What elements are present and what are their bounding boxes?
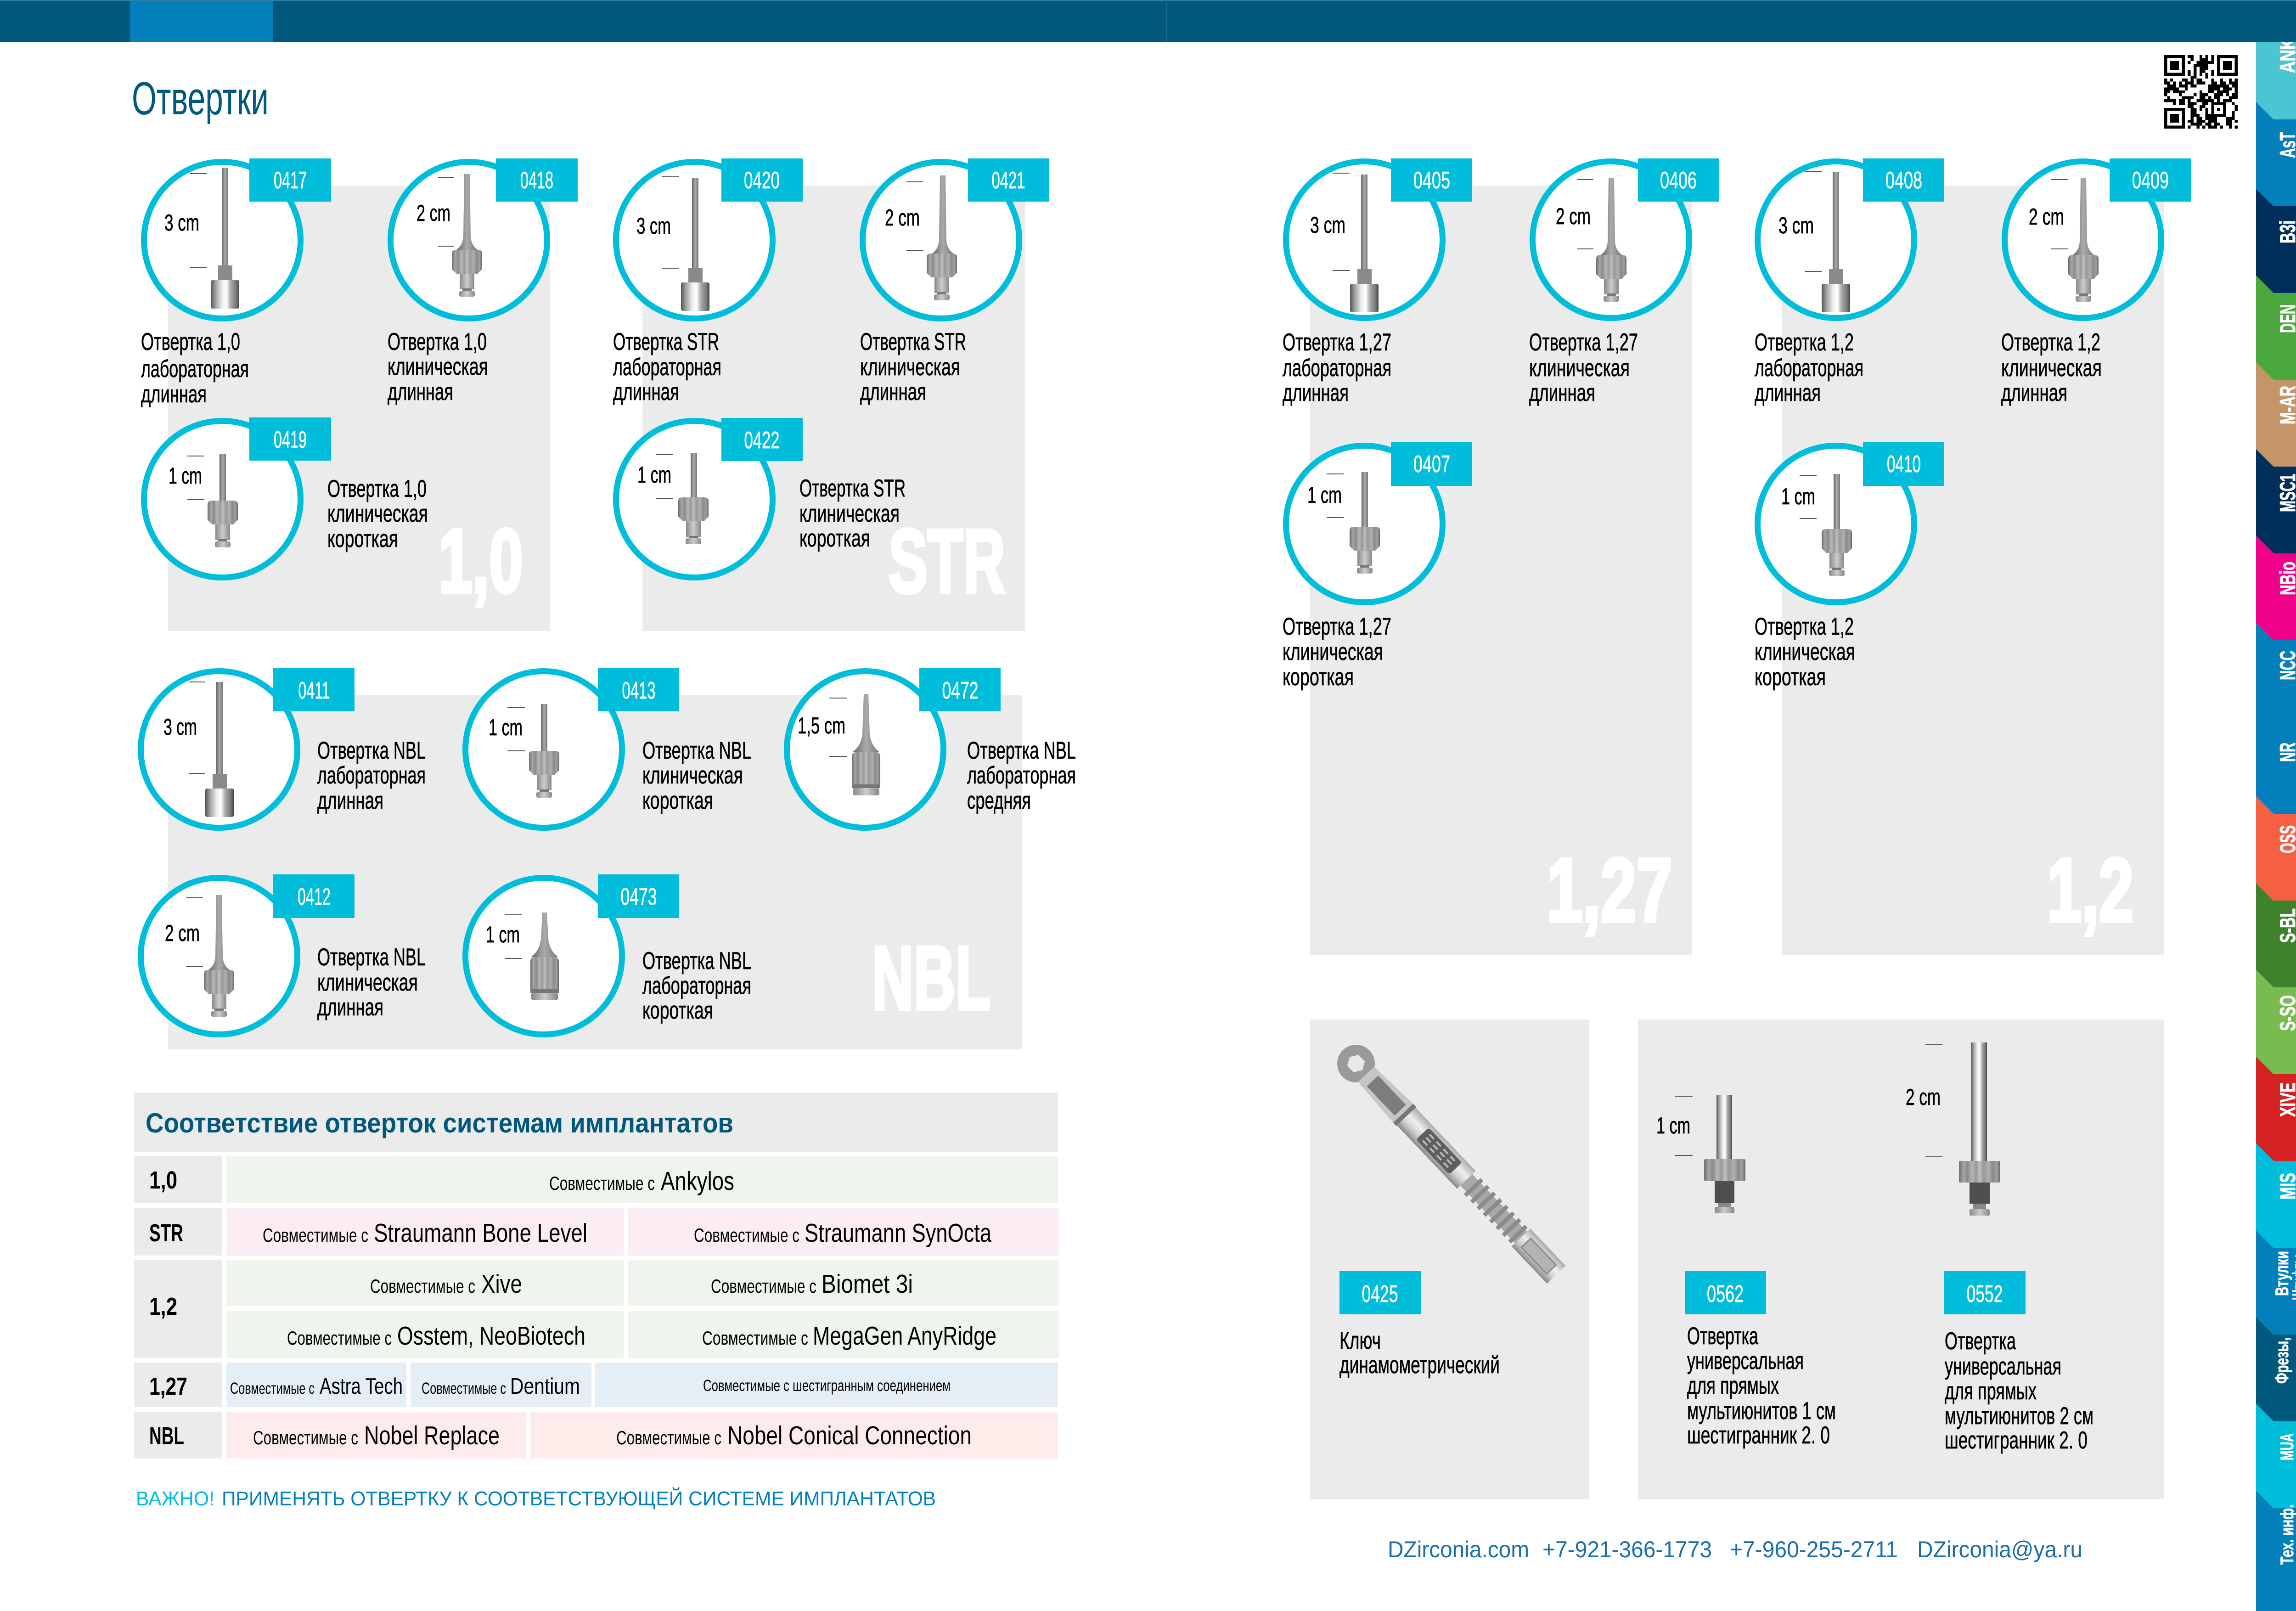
caption: короткая — [799, 525, 870, 552]
panel: 1,27 — [1310, 186, 1692, 955]
tab MUA — [2256, 1404, 2296, 1508]
caption: клиническая — [1283, 638, 1383, 665]
caption: мультиюнитов 2 см — [1945, 1403, 2093, 1430]
code: 0413 — [622, 677, 656, 704]
row NBL — [134, 1412, 1058, 1459]
caption: длинная — [2001, 379, 2067, 406]
row STR: Straumann SynOcta — [805, 1218, 991, 1248]
row NBL: Совместимые с — [616, 1427, 721, 1448]
caption: шестигранник 2. 0 — [1945, 1427, 2088, 1454]
code: 0409 — [2132, 167, 2169, 194]
row 1,2: Xive — [481, 1269, 522, 1299]
caption: клиническая — [317, 969, 418, 996]
screwdriver — [208, 454, 238, 547]
code — [2110, 158, 2191, 202]
size — [489, 708, 525, 751]
caption: клиническая — [388, 353, 488, 380]
row 1,0: Совместимые с — [549, 1172, 655, 1194]
header bar — [0, 0, 2296, 42]
caption — [1283, 329, 1391, 406]
caption: Отвертка 1,2 — [2001, 329, 2100, 356]
code — [721, 418, 803, 461]
circle — [141, 671, 298, 828]
circle — [466, 878, 622, 1034]
code — [1391, 158, 1472, 202]
caption: клиническая — [327, 500, 428, 527]
code 0425 — [1339, 1271, 1421, 1314]
code 0425: 0425 — [1362, 1281, 1398, 1307]
caption — [1687, 1323, 1836, 1449]
watermark: 1,27: 1,27 — [1547, 839, 1672, 941]
size: 3 cm — [636, 213, 671, 239]
code: 0422 — [744, 427, 780, 454]
caption: универсальная — [1945, 1353, 2061, 1380]
caption: шестигранник 2. 0 — [1687, 1422, 1830, 1449]
caption: Отвертка STR — [799, 475, 906, 502]
size — [169, 456, 204, 500]
code: 0410 — [1887, 451, 1921, 478]
caption — [613, 328, 721, 406]
warning note: ПРИМЕНЯТЬ ОТВЕРТКУ К СООТВЕТСТВУЮЩЕЙ СИСТЕМЕ ИМПЛАНТАТОВ — [222, 1487, 936, 1510]
size: 2 cm — [1906, 1084, 1941, 1110]
screwdriver — [1959, 1042, 2000, 1216]
row NBL: Nobel Replace — [364, 1421, 500, 1450]
caption: клиническая — [860, 354, 960, 381]
product 0413 — [466, 668, 751, 828]
size: 2 cm — [885, 205, 920, 231]
size: 2 cm — [2029, 204, 2064, 230]
caption: Отвертка STR — [613, 328, 719, 355]
code — [249, 417, 331, 461]
circle — [1758, 162, 1914, 318]
size — [1556, 180, 1593, 249]
footer contacts: DZirconia@ya.ru — [1917, 1537, 2082, 1562]
product 0409 — [2001, 158, 2191, 406]
size: 2 cm — [1556, 203, 1591, 229]
panel: universal drivers — [1638, 1020, 2164, 1499]
product 0418 — [388, 158, 578, 406]
caption: Отвертка 1,27 — [1529, 329, 1638, 356]
code: 0406 — [1660, 167, 1697, 194]
tab DEN — [2256, 276, 2296, 380]
size — [1307, 474, 1344, 518]
caption: Отвертка 1,0 — [141, 328, 240, 355]
caption — [967, 737, 1076, 814]
tab AsT — [2256, 102, 2296, 206]
size: 1 cm — [486, 922, 520, 947]
product 0405 — [1283, 158, 1472, 406]
tab burs — [2256, 1317, 2296, 1421]
screwdriver — [205, 682, 234, 817]
size: 2 cm — [165, 920, 200, 946]
product 0406 — [1529, 158, 1719, 406]
row 1,27: Совместимые с — [230, 1380, 315, 1397]
screwdriver — [1822, 474, 1852, 576]
caption: клиническая — [642, 762, 743, 789]
caption: длинная — [613, 378, 679, 406]
product 0421 — [860, 158, 1049, 406]
product 0419 — [144, 417, 428, 578]
code: 0407 — [1413, 451, 1450, 478]
tab XIVE — [2256, 1057, 2296, 1161]
row 1,2: Совместимые с — [370, 1275, 475, 1297]
code: 0408 — [1885, 167, 1922, 194]
caption — [1529, 329, 1638, 406]
caption: универсальная — [1687, 1347, 1804, 1374]
caption — [2001, 329, 2102, 406]
code — [919, 668, 1001, 711]
row 1,2: Совместимые с — [711, 1275, 816, 1297]
row STR: Совместимые с — [263, 1224, 368, 1246]
screwdriver — [452, 174, 482, 297]
table heading: Соответствие отверток системам имплантатов — [146, 1108, 733, 1138]
row 1,2: Biomet 3i — [822, 1269, 913, 1299]
caption: лабораторная — [141, 355, 249, 383]
side navigation tabs — [2256, 28, 2296, 1611]
code — [273, 668, 355, 711]
row NBL: Nobel Conical Connection — [727, 1421, 972, 1450]
size — [486, 915, 522, 958]
row 1,2 — [134, 1260, 1059, 1358]
product 0412 — [141, 874, 426, 1034]
caption: Отвертка NBL — [317, 737, 426, 764]
caption: Отвертка — [1945, 1328, 2016, 1355]
row 1,27: Совместимые с — [422, 1380, 506, 1397]
row STR — [134, 1208, 1059, 1256]
caption: Отвертка 1,2 — [1755, 613, 1854, 640]
circle — [616, 421, 772, 578]
warning note: ВАЖНО! — [136, 1487, 214, 1510]
caption — [642, 947, 751, 1024]
footer contacts — [1388, 1537, 2082, 1562]
size: 3 cm — [1310, 212, 1345, 238]
product 0473 — [466, 874, 751, 1034]
caption: лабораторная — [317, 762, 426, 789]
panel: 1,2 — [1782, 186, 2164, 955]
row 1,27 — [134, 1363, 1058, 1407]
caption — [141, 328, 249, 408]
size — [164, 174, 207, 268]
size — [416, 177, 454, 246]
size: 1 cm — [1656, 1113, 1690, 1138]
caption: мультиюнитов 1 см — [1687, 1397, 1836, 1425]
row 1,27: Совместимые с шестигранным соединением — [703, 1377, 951, 1395]
caption: лабораторная — [642, 972, 751, 999]
code — [598, 668, 679, 711]
code: 0412 — [298, 884, 331, 910]
size: 1 cm — [489, 715, 523, 740]
circle — [1758, 445, 1914, 603]
row STR: Straumann Bone Level — [374, 1218, 587, 1248]
row STR: Совместимые с — [694, 1224, 799, 1246]
screwdriver — [1704, 1095, 1745, 1213]
size — [163, 682, 205, 773]
code — [1863, 442, 1944, 486]
code: 0405 — [1413, 167, 1450, 194]
screwdriver — [681, 178, 709, 311]
caption: короткая — [327, 525, 398, 552]
screwdriver — [852, 694, 880, 795]
row 1,27: Astra Tech — [320, 1374, 403, 1399]
screwdriver — [678, 453, 709, 544]
tab tech info — [2256, 1491, 2296, 1611]
caption — [1755, 329, 1863, 406]
circle — [787, 671, 943, 828]
size: 1 cm — [1781, 484, 1815, 509]
size: 1 cm — [1307, 482, 1342, 508]
caption — [317, 737, 426, 814]
code — [1863, 158, 1944, 202]
size — [885, 182, 923, 250]
size: 2 cm — [416, 200, 450, 226]
caption: Отвертка NBL — [317, 944, 426, 971]
circle — [2005, 162, 2161, 318]
caption: Отвертка 1,0 — [327, 475, 427, 502]
caption — [860, 328, 966, 406]
row 1,27: 1,27 — [149, 1373, 187, 1400]
size: 3 cm — [164, 210, 199, 236]
product 0407 — [1283, 442, 1472, 691]
code: 0562 — [1707, 1281, 1744, 1307]
caption: клиническая — [1529, 355, 1630, 382]
caption: для прямых — [1945, 1378, 2037, 1405]
footer contacts: DZirconia.com — [1388, 1537, 1529, 1562]
caption: длинная — [1283, 379, 1349, 406]
caption: клиническая — [799, 500, 900, 527]
row 1,0: 1,0 — [149, 1166, 177, 1194]
size: 1 cm — [169, 463, 202, 489]
caption: короткая — [642, 997, 713, 1024]
code: 0473 — [621, 884, 657, 910]
circle — [144, 421, 300, 578]
size: 3 cm — [1778, 213, 1814, 238]
size — [637, 455, 673, 498]
code — [249, 158, 331, 202]
watermark: STR: STR — [889, 511, 1005, 612]
code — [1685, 1271, 1766, 1314]
caption: лабораторная — [1755, 355, 1863, 382]
size — [798, 698, 847, 756]
caption — [327, 475, 428, 552]
caption: длинная — [388, 378, 453, 406]
row NBL: Совместимые с — [253, 1427, 358, 1448]
screwdriver — [1822, 172, 1850, 312]
caption: Отвертка 1,0 — [388, 328, 487, 355]
circle — [1286, 162, 1443, 318]
screwdriver — [1350, 175, 1379, 312]
caption — [1339, 1327, 1500, 1379]
screwdriver — [204, 895, 234, 1017]
caption: короткая — [1755, 664, 1826, 691]
code: 0472 — [942, 677, 978, 704]
caption: Отвертка — [1687, 1323, 1758, 1350]
circle — [466, 671, 622, 828]
caption: Отвертка 1,27 — [1283, 329, 1391, 356]
compatibility table — [134, 1093, 1059, 1459]
tab NBio — [2256, 536, 2296, 640]
code — [721, 158, 803, 202]
circle — [1286, 445, 1443, 603]
caption: длинная — [1755, 379, 1821, 406]
row 1,0 — [134, 1156, 1058, 1203]
size — [2029, 180, 2068, 249]
caption: длинная — [141, 381, 207, 408]
caption: клиническая — [2001, 355, 2102, 382]
code: 0552 — [1966, 1281, 2003, 1307]
caption — [388, 328, 488, 406]
row 1,2: Совместимые с — [702, 1327, 808, 1349]
caption: короткая — [1283, 664, 1354, 691]
screwdriver — [211, 168, 239, 309]
icon: torque wrench — [1329, 1037, 1570, 1288]
code: 0411 — [298, 677, 330, 704]
code — [1944, 1271, 2026, 1314]
product 0420 — [613, 158, 803, 406]
code: 0419 — [274, 427, 307, 453]
caption: Отвертка NBL — [967, 737, 1076, 764]
caption: длинная — [317, 994, 383, 1021]
code — [968, 158, 1049, 202]
product 0408 — [1755, 158, 1944, 406]
screwdriver — [529, 704, 559, 798]
caption: лабораторная — [613, 354, 721, 381]
caption: длинная — [317, 787, 383, 814]
caption: лабораторная — [1283, 355, 1391, 382]
screwdriver — [927, 175, 957, 300]
product 0411 — [141, 668, 426, 828]
footer contacts: +7-921-366-1773 — [1542, 1537, 1712, 1562]
caption: Ключ — [1339, 1327, 1381, 1354]
tab S-BL — [2256, 883, 2296, 987]
caption: Отвертка 1,27 — [1283, 613, 1391, 640]
product 0417 — [141, 158, 331, 408]
caption — [1283, 613, 1391, 691]
caption — [642, 737, 751, 814]
circle — [616, 162, 772, 319]
screwdriver — [1350, 472, 1380, 574]
code — [1391, 442, 1472, 486]
page title: Отвертки — [132, 73, 269, 124]
screwdriver — [530, 913, 559, 1000]
code — [598, 874, 679, 918]
row 1,27: Dentium — [510, 1374, 580, 1399]
product 0552 — [1906, 1042, 2093, 1454]
row NBL: NBL — [149, 1422, 184, 1450]
tab MIS — [2256, 1143, 2296, 1248]
QR code — [2164, 56, 2238, 127]
panel: 1,0 — [168, 186, 550, 631]
row 1,2: Совместимые с — [287, 1327, 392, 1349]
size: 1 cm — [637, 462, 671, 488]
tab OSS — [2256, 796, 2296, 901]
code: 0421 — [992, 167, 1025, 194]
tab B3i — [2256, 189, 2296, 293]
size — [636, 177, 679, 268]
screwdriver — [1596, 178, 1626, 302]
size: 1,5 cm — [798, 713, 845, 738]
tab bushings — [2256, 1230, 2296, 1335]
circle — [1533, 162, 1689, 318]
tab bushings: Втулки — [2272, 1251, 2292, 1296]
size — [1656, 1096, 1693, 1155]
size: 3 cm — [163, 714, 197, 740]
circle — [862, 162, 1019, 319]
tab M-AR — [2256, 362, 2296, 467]
size — [165, 898, 203, 967]
product 0410 — [1755, 442, 1944, 691]
code: 0418 — [520, 167, 553, 194]
screwdriver — [2068, 178, 2099, 302]
caption: динамометрический — [1339, 1352, 1500, 1379]
panel: NBL — [168, 695, 1022, 1049]
caption: длинная — [1529, 379, 1595, 406]
caption: Отвертка NBL — [642, 947, 751, 974]
size — [1310, 173, 1350, 270]
caption: короткая — [642, 787, 713, 814]
code — [273, 874, 355, 918]
caption: Отвертка NBL — [642, 737, 751, 764]
product 0562 — [1656, 1095, 1836, 1449]
caption: клиническая — [1755, 638, 1855, 665]
row 1,2: Osstem, NeoBiotech — [397, 1321, 585, 1351]
tab ANK — [2256, 28, 2296, 119]
footer contacts: +7-960-255-2711 — [1730, 1537, 1898, 1562]
circle — [390, 162, 547, 319]
size — [1906, 1045, 1942, 1157]
table heading — [134, 1093, 1058, 1152]
code — [496, 158, 578, 202]
tab burs: Фрезы, — [2272, 1337, 2292, 1384]
watermark: NBL: NBL — [872, 928, 990, 1029]
caption: Отвертка 1,2 — [1755, 329, 1854, 356]
caption: длинная — [860, 378, 926, 406]
circle — [141, 878, 298, 1034]
tab NCC — [2256, 623, 2296, 727]
caption: для прямых — [1687, 1372, 1779, 1399]
product 0472 — [787, 668, 1076, 828]
code — [1638, 158, 1719, 202]
row 1,2: MegaGen AnyRidge — [813, 1321, 996, 1351]
size — [1781, 475, 1817, 518]
caption — [317, 944, 426, 1021]
caption — [1755, 613, 1855, 691]
caption: Отвертка STR — [860, 328, 966, 355]
caption: средняя — [967, 787, 1031, 814]
row 1,2: 1,2 — [149, 1293, 177, 1320]
code: 0420 — [744, 167, 780, 194]
size — [1778, 171, 1822, 271]
row 1,0: Ankylos — [661, 1166, 734, 1196]
code: 0417 — [274, 167, 307, 194]
product 0422 — [616, 418, 906, 578]
circle — [144, 162, 300, 319]
caption — [1945, 1328, 2093, 1454]
caption: лабораторная — [967, 762, 1076, 789]
watermark: 1,0: 1,0 — [439, 510, 523, 611]
panel: torque wrench 0425 — [1310, 1020, 1589, 1499]
row STR: STR — [149, 1219, 183, 1247]
panel: STR — [642, 186, 1025, 631]
tab NR — [2256, 710, 2296, 814]
watermark: 1,2: 1,2 — [2047, 839, 2133, 941]
tab S-SO — [2256, 970, 2296, 1074]
caption — [799, 475, 906, 552]
tab MSC1 — [2256, 449, 2296, 553]
